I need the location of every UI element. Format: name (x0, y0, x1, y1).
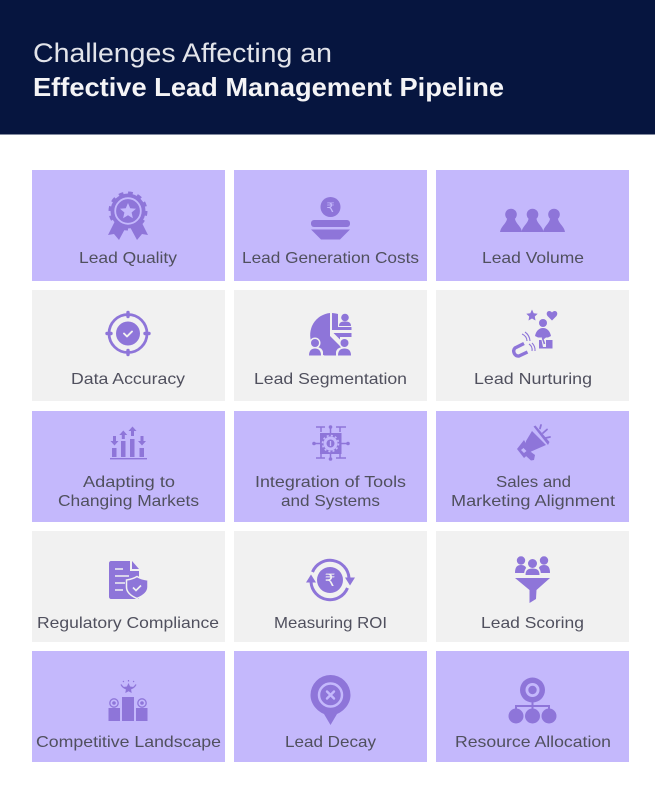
icon: bars with arrows (110, 426, 147, 459)
label: Competitive Landscape (36, 734, 221, 751)
icon: document with shield (109, 561, 148, 599)
label: Integration of Tools (255, 474, 406, 491)
label: Lead Decay (285, 734, 376, 751)
label (58, 474, 199, 510)
icon: podium with star (108, 680, 148, 721)
label: Measuring ROI (274, 615, 387, 632)
icon: map pin with x (310, 675, 350, 725)
label (451, 474, 616, 510)
label: Resource Allocation (455, 734, 611, 751)
label: Lead Nurturing (474, 371, 592, 388)
label: Lead Scoring (481, 615, 584, 632)
panel: regulatory compliance (32, 531, 225, 642)
panel: lead volume (436, 170, 629, 281)
panel: lead nurturing (436, 290, 629, 401)
label: Changing Markets (58, 493, 199, 510)
panel: lead decay (234, 651, 427, 762)
icon: magnet, person, star and heart (514, 310, 557, 356)
panel: lead scoring (436, 531, 629, 642)
panel: lead quality (32, 170, 225, 281)
panel: sales and marketing alignment (436, 411, 629, 522)
icon: coin and bowl (311, 197, 350, 240)
panel: lead segmentation (234, 290, 427, 401)
icon: segmented pie with people (300, 313, 360, 362)
icon: megaphone (517, 425, 550, 460)
label: Marketing Alignment (451, 493, 616, 510)
label: Lead Quality (79, 250, 177, 267)
panel: data accuracy (32, 290, 225, 401)
label: Data Accuracy (71, 371, 185, 388)
label: Regulatory Compliance (37, 615, 219, 632)
icon: coin and bowl: ₹ (326, 200, 335, 215)
icon: chip with connectors (312, 425, 350, 461)
panel: integration of tools and systems (234, 411, 427, 522)
title: Challenges Affecting an (33, 38, 332, 68)
title: Effective Lead Management Pipeline (33, 72, 504, 102)
panel: lead generation costs (234, 170, 427, 281)
icon: rupee with cycle arrows (306, 560, 355, 600)
icon: award rosette (108, 193, 148, 240)
icon: three people (500, 209, 565, 232)
icon: rupee with cycle arrows: ₹ (325, 571, 335, 590)
panel: adapting to changing markets (32, 411, 225, 522)
label: Sales and (496, 474, 571, 491)
title (33, 38, 504, 102)
label: Lead Generation Costs (242, 250, 419, 267)
label: and Systems (281, 493, 380, 510)
header band (0, 0, 655, 134)
label: Lead Segmentation (254, 371, 407, 388)
label (255, 474, 406, 510)
icon: hierarchy nodes (508, 678, 556, 724)
label: Adapting to (83, 474, 175, 491)
icon: target with check (107, 312, 149, 354)
panel: competitive landscape (32, 651, 225, 762)
panel: resource allocation (436, 651, 629, 762)
label: Lead Volume (482, 250, 584, 267)
icon: people over funnel (515, 556, 550, 603)
panel: measuring roi (234, 531, 427, 642)
